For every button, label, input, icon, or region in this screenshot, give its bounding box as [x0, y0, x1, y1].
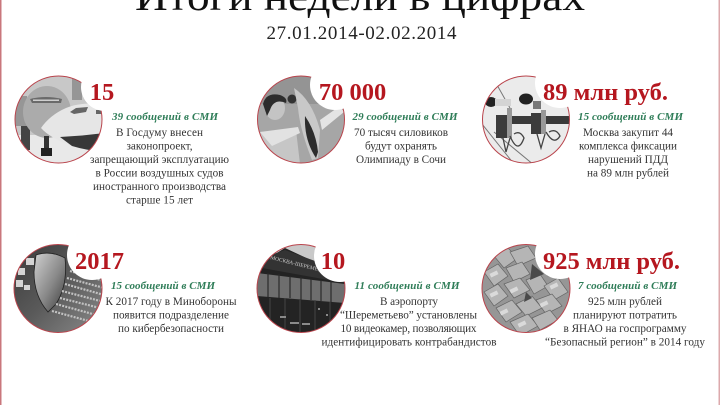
description: 70 тысяч силовиков: [354, 127, 448, 139]
white cutout: [535, 229, 585, 279]
left border line: [0, 0, 2, 405]
description: по кибербезопасности: [118, 323, 224, 335]
icon: torch bearer photo: [257, 76, 345, 164]
icon: traffic cameras photo: [482, 76, 571, 170]
right border line: [718, 0, 720, 405]
number: 2017: 2017: [75, 248, 124, 275]
panel: regional budget: [482, 244, 705, 348]
description: будут охранять: [365, 140, 437, 152]
media count: 29 сообщений в СМИ: [352, 111, 458, 123]
description: В Госдуму внесен: [116, 127, 203, 139]
description: В аэропорту: [380, 296, 438, 308]
description: [322, 296, 496, 348]
white cutout: [67, 230, 117, 280]
description: старше 15 лет: [126, 194, 193, 206]
description: в ЯНАО на госпрограмму: [564, 323, 687, 335]
panel: cybersecurity: [14, 244, 236, 334]
icon: airplanes photo: [15, 76, 104, 164]
number: 925 млн руб.: 925 млн руб.: [543, 248, 680, 275]
white cutout: [310, 60, 360, 110]
description: [90, 127, 229, 206]
icon: airport terminal photo: МОСКВА-ШЕРЕМЕТЬЕВО: [270, 255, 336, 277]
panel: Sheremetyevo cameras: [256, 244, 496, 348]
description: законопроект,: [126, 140, 193, 152]
description: “Шереметьево” установлены: [340, 310, 477, 322]
description: [579, 127, 677, 180]
description: иностранного производства: [93, 181, 226, 193]
description: планируют потратить: [573, 310, 677, 322]
panel: traffic cameras: [482, 76, 684, 179]
date range: 27.01.2014-02.02.2014: [266, 23, 457, 44]
description: 925 млн рублей: [588, 296, 662, 308]
description: Олимпиаду в Сочи: [356, 154, 446, 166]
description: “Безопасный регион” в 2014 году: [545, 336, 705, 348]
description: запрещающий эксплуатацию: [90, 154, 229, 166]
white cutout: [535, 58, 585, 108]
description: на 89 млн рублей: [587, 168, 669, 180]
number: 15: 15: [90, 79, 114, 106]
description: К 2017 году в Минобороны: [106, 296, 237, 308]
description: [354, 127, 448, 166]
media count: 15 сообщений в СМИ: [111, 280, 215, 292]
description: 10 видеокамер, позволяющих: [340, 323, 477, 335]
media count: 7 сообщений в СМИ: [578, 280, 677, 292]
panel: aircraft ban: [15, 63, 229, 206]
description: комплекса фиксации: [579, 140, 677, 152]
icon: banknote stacks photo: [482, 244, 570, 336]
number: 70 000: 70 000: [319, 79, 386, 106]
panel: Olympic security: [257, 76, 458, 166]
description: Москва закупит 44: [583, 127, 673, 139]
white cutout: [314, 230, 366, 282]
media count: 11 сообщений в СМИ: [354, 280, 460, 292]
description: [545, 296, 705, 348]
description: нарушений ПДД: [588, 154, 668, 166]
number: 10: 10: [321, 248, 345, 275]
description: в России воздушных судов: [96, 168, 224, 180]
media count: 15 сообщений в СМИ: [578, 111, 683, 123]
number: 89 млн руб.: 89 млн руб.: [543, 79, 668, 106]
description: [106, 296, 237, 335]
icon: shield and data photo: [14, 244, 104, 333]
white cutout: [81, 63, 129, 111]
icon: airport terminal photo: [257, 244, 345, 333]
description: появится подразделение: [113, 310, 229, 322]
description: идентифицировать контрабандистов: [322, 336, 496, 348]
media count: 39 сообщений в СМИ: [111, 111, 218, 123]
